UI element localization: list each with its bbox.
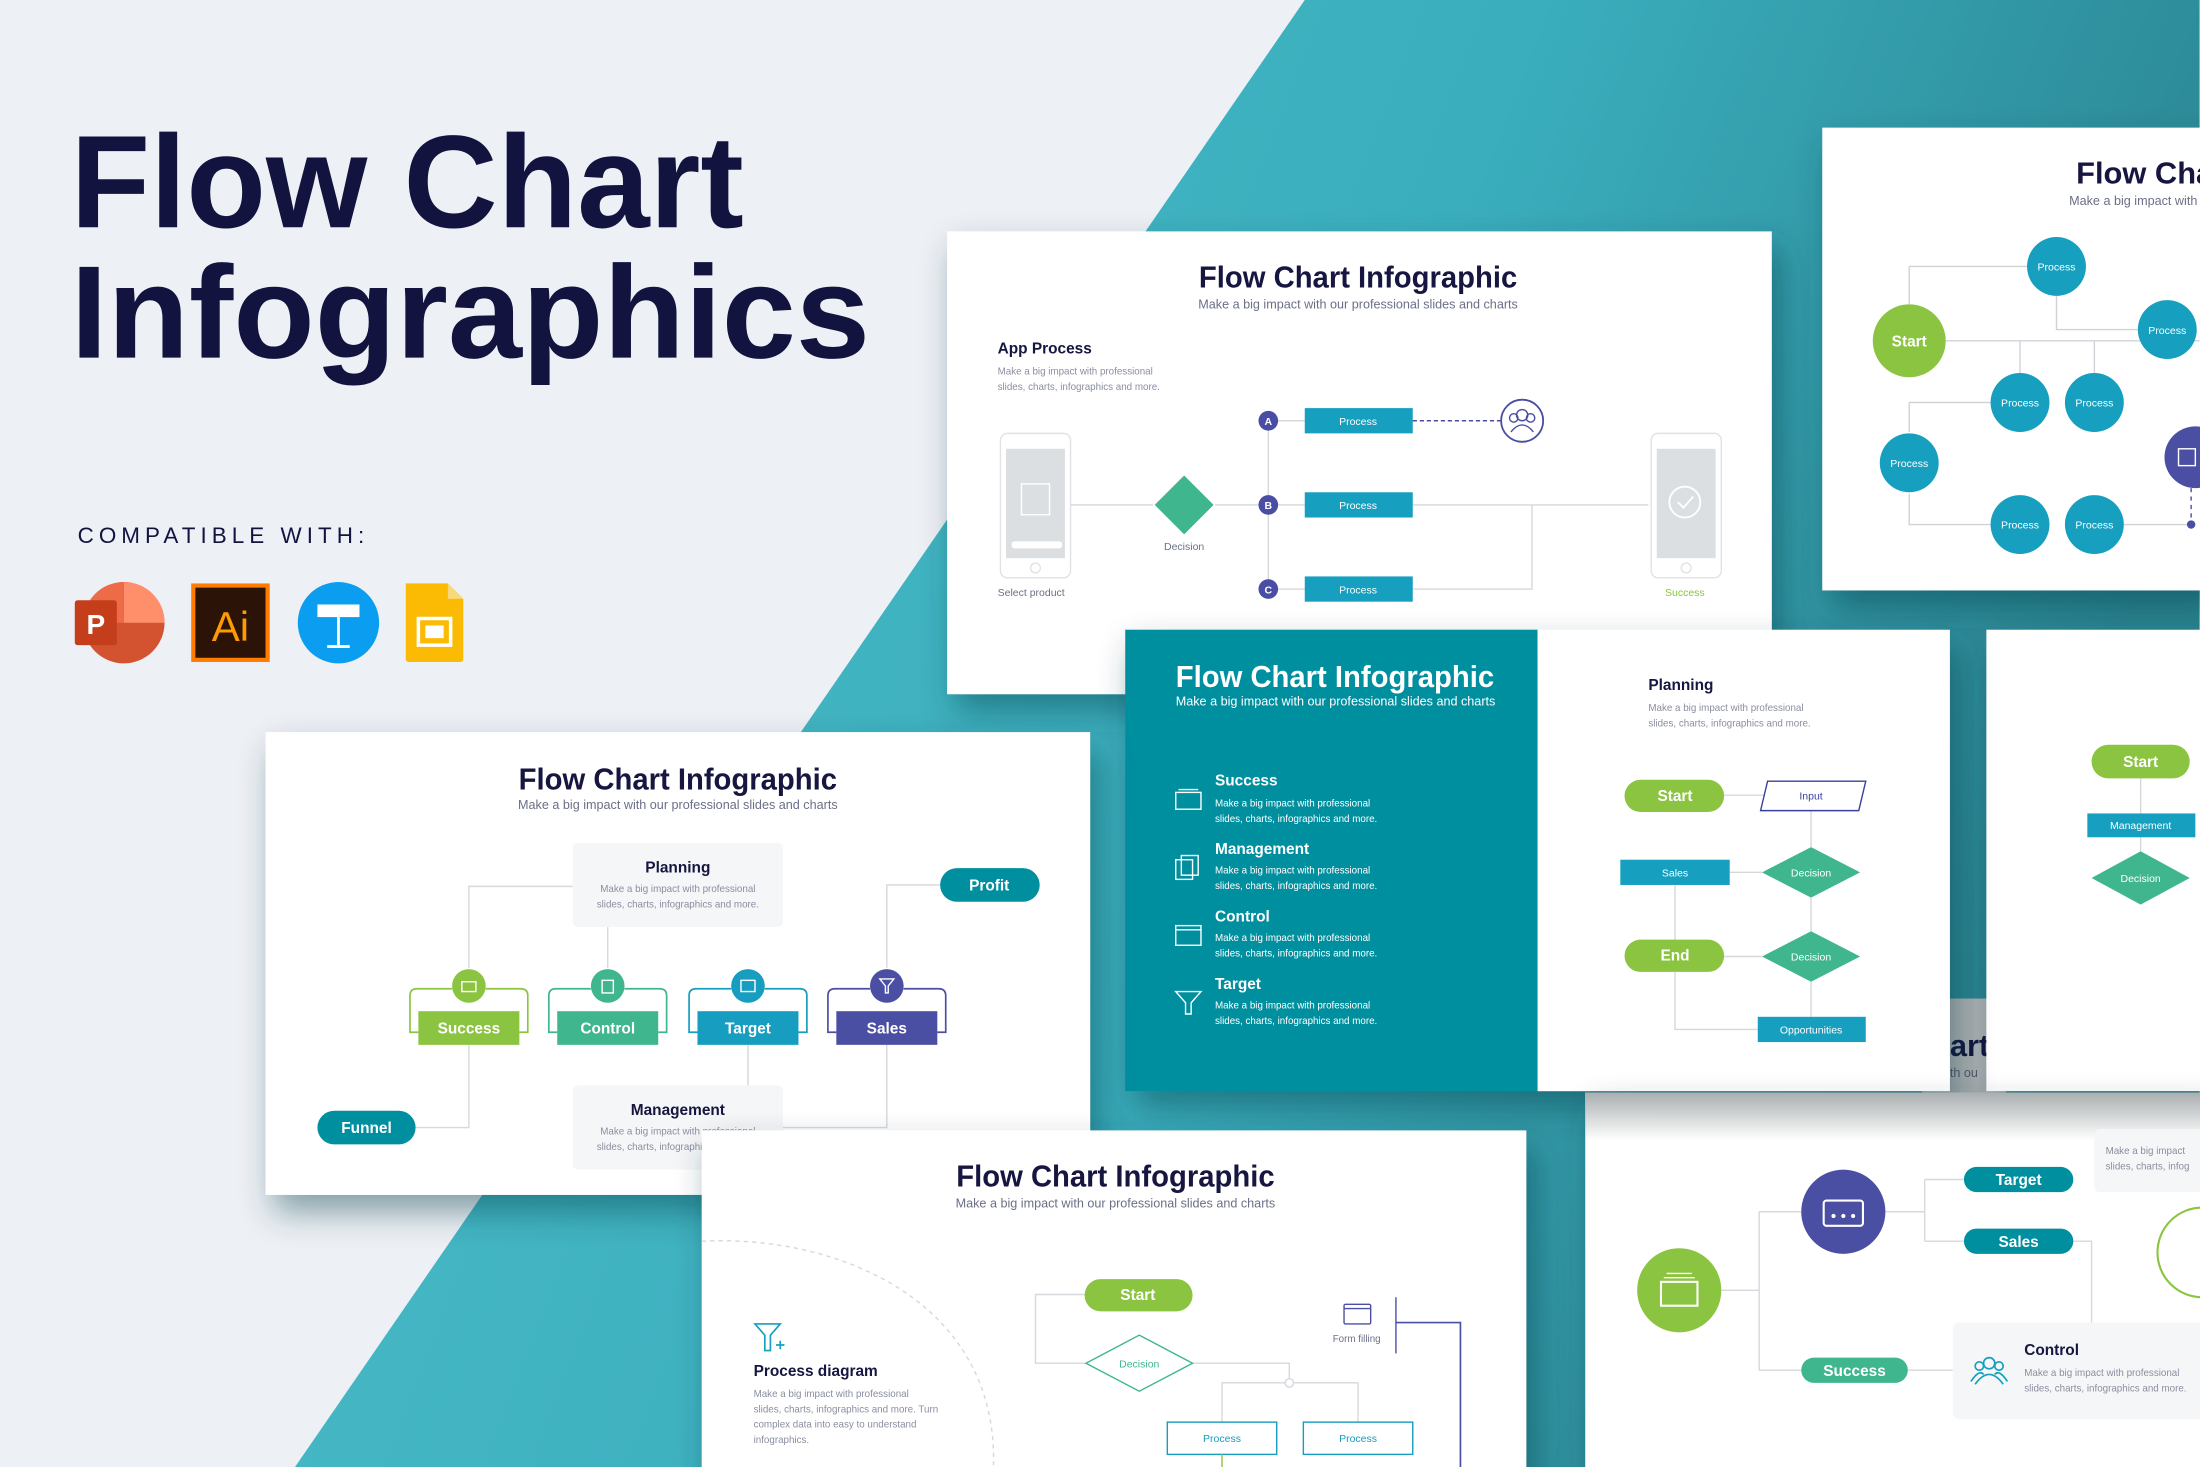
icon: illustrator: Ai bbox=[212, 603, 249, 650]
slide: left items: slides, charts, infographics and more. bbox=[597, 1142, 759, 1153]
list items: Make a big impact with professional bbox=[1215, 866, 1370, 877]
slide: bottom right circles: slides, charts, infographics and more. bbox=[2024, 1383, 2187, 1394]
slide: bottom right circles: Make a big impact with professional bbox=[2024, 1368, 2179, 1379]
slide: left items: Funnel bbox=[341, 1120, 392, 1137]
slide: top right circles: Process bbox=[2038, 262, 2075, 274]
slide: bottom process diagram: Form filling bbox=[1333, 1334, 1381, 1345]
list items: slides, charts, infographics and more. bbox=[1215, 948, 1377, 959]
list items: Control bbox=[1215, 908, 1270, 925]
slide: top right circles: Process bbox=[2075, 398, 2113, 410]
slide: top right circles: Process bbox=[1890, 458, 1928, 470]
slide: app process: Make a big impact with our professional slides and charts bbox=[1198, 298, 1518, 312]
icon: illustrator bbox=[191, 583, 270, 662]
slide: app process: Process bbox=[1339, 584, 1377, 596]
slide: bottom right circles: slides, charts, infog bbox=[2106, 1162, 2189, 1173]
slide: left items bbox=[266, 732, 1090, 1195]
list items: Success bbox=[1215, 772, 1278, 789]
slide: app process: Make a big impact with professional bbox=[998, 366, 1153, 377]
compatible with label: COMPATIBLE WITH: bbox=[78, 523, 369, 548]
slide: bottom process diagram: Flow Chart Infographic bbox=[956, 1159, 1275, 1194]
slide: grey partial behind: ith ou bbox=[1947, 1066, 1978, 1080]
slide: app process: Process bbox=[1339, 500, 1377, 512]
slide: teal list + planning: Planning bbox=[1648, 677, 1713, 694]
slide: app process: C bbox=[1265, 584, 1273, 596]
slide: teal list + planning: Make a big impact with our professional slides and charts bbox=[1176, 694, 1495, 708]
slide: left items: Planning bbox=[645, 859, 710, 876]
slide: top right circles: Process bbox=[2001, 398, 2039, 410]
main title: Infographics bbox=[71, 239, 870, 386]
icon: powerpoint: P bbox=[86, 609, 105, 640]
slide: bottom process diagram bbox=[702, 1130, 1526, 1467]
slide: teal list + planning: Opportunities bbox=[1780, 1025, 1842, 1037]
slide: grey partial behind: art bbox=[1950, 1028, 1989, 1063]
slide: teal list + planning: Decision bbox=[1791, 952, 1831, 964]
slide: left items: Make a big impact with our professional slides and charts bbox=[518, 798, 838, 812]
slide: right partial start/management bbox=[1986, 630, 2200, 1091]
main title bbox=[71, 108, 870, 386]
slide: teal list + planning: slides, charts, infographics and more. bbox=[1648, 718, 1811, 729]
slide: bottom process diagram: Make a big impact with our professional slides and charts bbox=[956, 1197, 1275, 1211]
slide: app process: B bbox=[1265, 500, 1273, 512]
slide: left items: Make a big impact with professional bbox=[600, 884, 755, 895]
slide: app process: Select product bbox=[998, 587, 1065, 599]
slide: bottom right circles: Make a big impact bbox=[2106, 1146, 2185, 1157]
slide: app process: slides, charts, infographics and more. bbox=[998, 382, 1160, 393]
icon: keynote bbox=[298, 582, 379, 663]
slide: right partial start/management: Management bbox=[2110, 820, 2171, 832]
slide: right partial start/management: Start bbox=[2123, 754, 2158, 771]
icon: google slides bbox=[406, 583, 463, 662]
slide: bottom process diagram: Make a big impact with professional bbox=[754, 1389, 909, 1400]
slide title: Flow Chart Infographic bbox=[1199, 260, 1517, 295]
slide: top right circles: Process bbox=[2001, 520, 2039, 532]
slide: left items: Success bbox=[438, 1021, 500, 1038]
slide: app process: Decision bbox=[1164, 541, 1204, 553]
slide: left items: Profit bbox=[969, 878, 1009, 895]
slide: left items: Sales bbox=[867, 1021, 907, 1038]
slide: grey partial behind bbox=[1922, 999, 2006, 1111]
slide: app process: App Process bbox=[998, 340, 1092, 357]
main title: Flow Chart bbox=[71, 108, 744, 255]
list items: Make a big impact with professional bbox=[1215, 798, 1370, 809]
list items: slides, charts, infographics and more. bbox=[1215, 1016, 1377, 1027]
slide: bottom right circles: Target bbox=[1996, 1172, 2042, 1189]
list items: Make a big impact with professional bbox=[1215, 1000, 1370, 1011]
slide: right partial start/management: Decision bbox=[2121, 873, 2161, 885]
slide: teal list + planning: Start bbox=[1657, 788, 1693, 805]
list items: slides, charts, infographics and more. bbox=[1215, 814, 1377, 825]
slide: left items: Management bbox=[631, 1102, 725, 1119]
slide: app process: Success bbox=[1665, 587, 1705, 599]
slide: teal list + planning: Decision bbox=[1791, 868, 1831, 880]
slide: app process: Process bbox=[1339, 416, 1377, 428]
list items: slides, charts, infographics and more. bbox=[1215, 881, 1377, 892]
slide: bottom process diagram: Start bbox=[1120, 1287, 1155, 1304]
phone left bbox=[1000, 433, 1071, 578]
slide: bottom process diagram: slides, charts, infographics and more. Turn bbox=[754, 1404, 938, 1415]
slide: left items: Flow Chart Infographic bbox=[519, 762, 837, 797]
slide: app process bbox=[947, 231, 1772, 694]
slide: teal list + planning: Flow Chart Infographic bbox=[1176, 659, 1494, 694]
list items: Target bbox=[1215, 976, 1261, 993]
slide: top right circles: Process bbox=[2075, 520, 2113, 532]
slide: left items: Control bbox=[580, 1021, 635, 1038]
slide: top right circles: Process bbox=[2148, 325, 2186, 337]
slide: app process: A bbox=[1265, 416, 1273, 428]
slide: bottom right circles bbox=[1585, 1093, 2200, 1467]
phone right bbox=[1651, 433, 1721, 578]
list items: Make a big impact with professional bbox=[1215, 933, 1370, 944]
app icons bbox=[75, 582, 463, 663]
list items: Management bbox=[1215, 841, 1309, 858]
slide: left items: Target bbox=[725, 1021, 771, 1038]
slide: teal list + planning: Input bbox=[1799, 790, 1823, 802]
slide: bottom process diagram: Decision bbox=[1119, 1358, 1160, 1370]
list items bbox=[1215, 772, 1377, 1027]
slide: bottom right circles: Sales bbox=[1998, 1234, 2039, 1251]
slide: teal list + planning: End bbox=[1660, 948, 1690, 965]
slide: teal list + planning bbox=[1125, 630, 1950, 1091]
slide: top right circles: Start bbox=[1892, 333, 1927, 350]
slide: bottom process diagram: Process bbox=[1339, 1433, 1377, 1445]
slide: bottom right circles: Success bbox=[1823, 1363, 1886, 1380]
slide: top right circles bbox=[1822, 128, 2200, 590]
slide: bottom right circles: Control bbox=[2024, 1342, 2079, 1359]
slide: bottom process diagram: Process diagram bbox=[754, 1363, 878, 1380]
slide: teal list + planning: Make a big impact with professional bbox=[1648, 703, 1804, 714]
icon: powerpoint bbox=[75, 582, 165, 663]
slide: bottom process diagram: infographics. bbox=[754, 1435, 809, 1446]
slide: left items: slides, charts, infographics and more. bbox=[597, 899, 759, 910]
slide: bottom process diagram: Process bbox=[1203, 1433, 1241, 1445]
slide: left items: Make a big impact with professional bbox=[600, 1127, 755, 1138]
slide: teal list + planning: Sales bbox=[1662, 868, 1688, 880]
slide: bottom process diagram: complex data into easy to understand bbox=[754, 1420, 916, 1431]
